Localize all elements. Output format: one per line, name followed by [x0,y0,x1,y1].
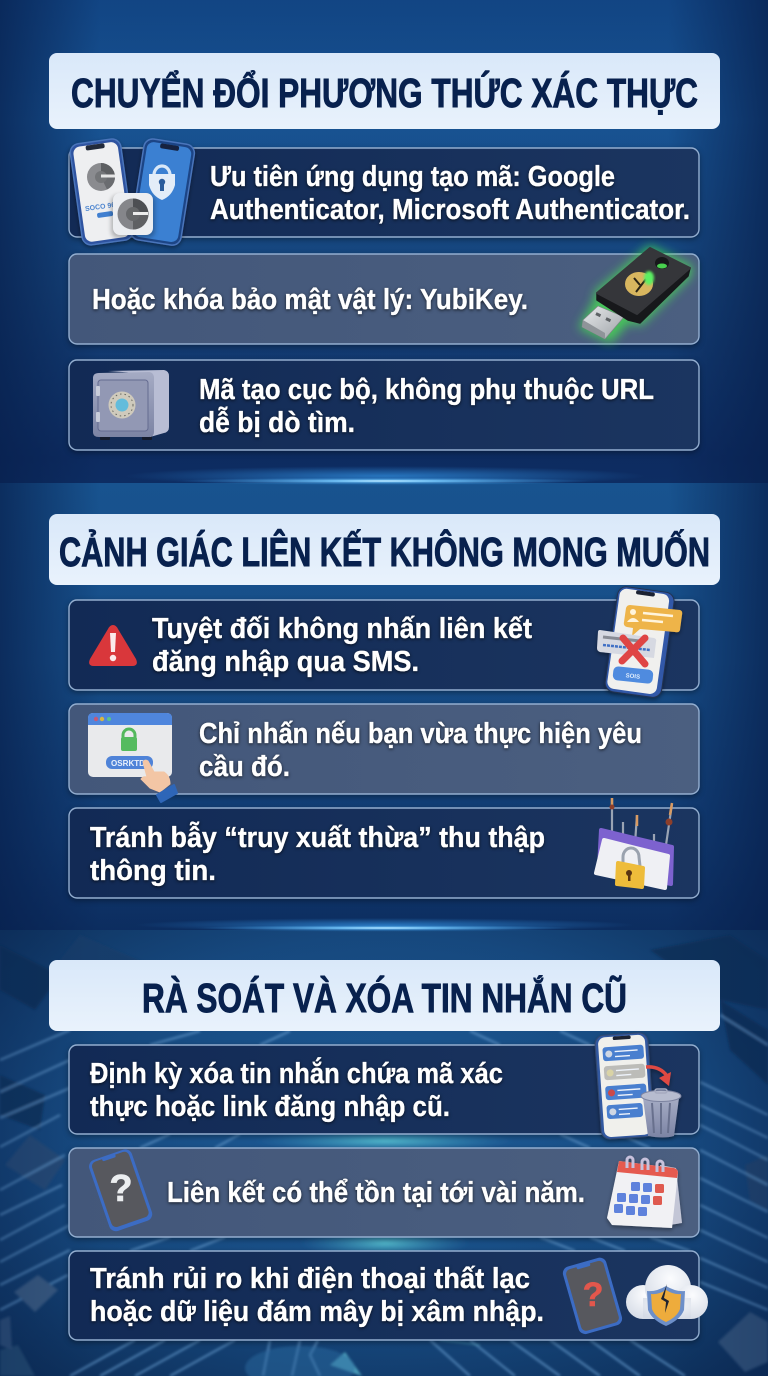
text: delete old codes: Định kỳ xóa tin nhắn chứa mã xác [90,1056,503,1090]
card: lost phone or cloud breach [69,1251,708,1340]
text: lost phone or cloud breach [90,1263,544,1328]
glow divider between sections 2 and 3 [135,918,635,932]
text: authenticator apps: Ưu tiên ứng dụng tạo mã: Google [210,161,615,193]
icon: dark phone with white question mark [87,1148,154,1233]
panel: section 3 review and delete old messages [49,960,720,1340]
text: leftover access trap: Tránh bẫy “truy xuất thừa” thu thập [90,820,545,854]
decorative edge vignette on sections 1 and 2 [0,0,768,930]
background: section 3 circuit board [0,930,768,1376]
heading: section 3: RÀ SOÁT VÀ XÓA TIN NHẮN CŨ [142,975,627,1021]
icon: dark phone with red question mark: ? [583,1276,603,1314]
text: only click if requested: cầu đó. [199,751,290,783]
card: local codes [69,360,699,450]
text: leftover access trap [90,820,545,887]
card: authenticator apps [69,138,699,246]
text: lost phone or cloud breach: hoặc dữ liệu đám mây bị xâm nhập. [90,1296,544,1328]
icon: browser with lock and pointing hand [88,713,177,802]
text: local codes [199,374,654,439]
card: delete old codes [69,1032,699,1140]
card: SMS login links [69,586,699,699]
card: leftover access trap [69,798,699,898]
text: only click if requested: Chỉ nhấn nếu bạn vừa thực hiện yêu [199,718,642,750]
icon: phone messages into trash [595,1032,681,1140]
text: local codes: dễ bị dò tìm. [199,405,355,439]
background: section 2 [0,483,768,930]
card: links persist for years [69,1148,699,1237]
text: authenticator apps: Authenticator, Microsoft Authenticator. [210,194,690,226]
text: delete old codes [90,1056,503,1123]
text: only click if requested [199,718,642,783]
icon: phone with blocked SMS link: SOIS [625,673,640,681]
text: SMS login links: Tuyệt đối không nhấn liên kết [152,613,532,645]
icon: dark phone with red question mark [561,1256,624,1336]
text: links persist for years: Liên kết có thể tồn tại tới vài năm. [167,1177,585,1209]
glow divider between sections 1 and 2 [0,466,768,486]
text: SMS login links: đăng nhập qua SMS. [152,646,419,678]
text: local codes: Mã tạo cục bộ, không phụ thuộc URL [199,374,654,406]
icon: authenticator phones: SOCO 96 [85,202,116,213]
icon: phone with blocked SMS link [597,586,682,699]
text: YubiKey: Hoặc khóa bảo mật vật lý: YubiKey. [92,284,528,316]
icon: warning triangle [89,625,137,666]
card: only click if requested [69,704,699,802]
text: leftover access trap: thông tin. [90,855,216,887]
icon: browser with lock and pointing hand: OSRKTD [111,759,145,768]
panel: section 1 authentication methods [49,53,720,450]
background: section 1 [0,0,768,483]
icon: hooked folder with padlock [596,798,672,888]
card: physical security key [69,248,699,344]
icon: calendar [607,1157,682,1228]
text: authenticator apps [210,161,690,226]
icon: dark phone with white question mark: ? [109,1168,133,1210]
heading: section 2 [49,514,720,585]
heading: section 1 [49,53,720,129]
panel: section 2 unexpected links [49,514,720,898]
icon: safe [93,370,169,440]
icon: cloud with cracked shield [626,1265,708,1326]
heading: section 3 [49,960,720,1031]
text: delete old codes: thực hoặc link đăng nhập cũ. [90,1091,450,1123]
icon: YubiKey USB [582,248,690,340]
text: SMS login links [152,613,532,678]
text: lost phone or cloud breach: Tránh rủi ro khi điện thoại thất lạc [90,1263,530,1295]
icon: authenticator phones [69,138,196,246]
